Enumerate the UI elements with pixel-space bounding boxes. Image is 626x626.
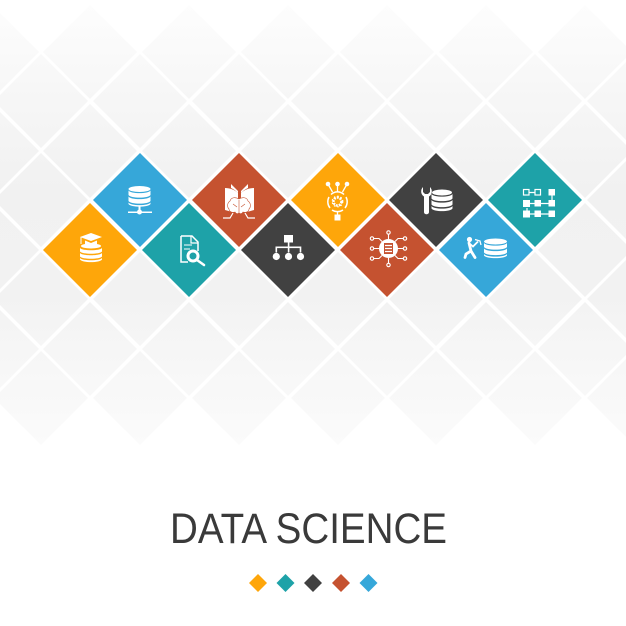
panel: orange diamond, graduate database <box>43 203 137 297</box>
panel: teal diamond, flow diagram <box>488 153 582 247</box>
icon: miner with database <box>465 237 507 258</box>
panel: blue diamond, network database <box>93 153 187 247</box>
icon: book with brain <box>223 184 255 218</box>
icon: wrench and database <box>421 187 452 214</box>
title: DATA SCIENCE <box>170 505 447 553</box>
icon: gear with nodes <box>326 182 349 220</box>
panel: red diamond, data chip <box>340 203 434 297</box>
panel: orange diamond, idea gear network <box>291 153 385 247</box>
icon: hierarchy tree <box>273 235 304 260</box>
icon: database with graduation cap <box>80 233 102 262</box>
panel: dark diamond, database wrench <box>389 153 483 247</box>
icon: node flow diagram <box>523 189 555 218</box>
icon: network database <box>128 186 152 214</box>
background diamond lattice <box>0 5 626 445</box>
panel: blue diamond, data mining <box>439 203 533 297</box>
panel: red diamond, book and brain <box>192 153 286 247</box>
icon: data chip with circuit traces <box>370 231 407 267</box>
icon: document with magnifier <box>181 236 204 265</box>
legend: colored diamonds <box>249 574 378 592</box>
panel: teal diamond, document search <box>142 203 236 297</box>
panel: dark diamond, hierarchy <box>241 203 335 297</box>
